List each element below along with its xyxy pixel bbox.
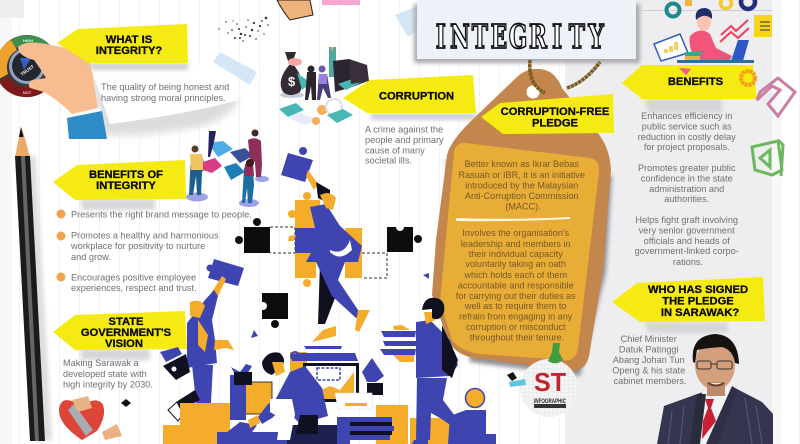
blue piece top xyxy=(281,153,313,182)
text: vision: Making Sarawak a xyxy=(63,358,139,368)
black piece left xyxy=(244,227,270,253)
illustration: left man xyxy=(160,276,234,421)
pencil xyxy=(15,127,52,442)
icon: pink paper clip xyxy=(757,78,795,116)
text: pledge detail: voluntarily taking an oath xyxy=(465,259,566,269)
text: pledge detail: well as to require them to xyxy=(464,301,567,311)
text: pledge intro: (MACC). xyxy=(505,202,541,212)
text: pledge detail: for carrying out their duties as xyxy=(456,291,576,301)
text: benefits list: reduction in costly delay xyxy=(638,132,736,142)
banner: state vision: STATE xyxy=(108,316,144,328)
portrait: chief minister xyxy=(657,334,773,444)
gear navy xyxy=(741,0,755,9)
banner: corruption-free pledge xyxy=(481,94,614,134)
illustration: man with papers xyxy=(380,298,470,444)
text: benefits list: Helps fight graft involving xyxy=(635,215,738,225)
banner: benefits of integrity: INTEGRITY xyxy=(96,180,156,192)
text: benefits list: Promotes greater public xyxy=(638,163,736,173)
text: pledge detail: corruption or misconduct xyxy=(466,322,566,332)
text: bullets: and grow. xyxy=(71,252,111,262)
orange pieces xyxy=(295,200,320,253)
text: pledge intro: introduced by the Malaysian xyxy=(465,180,578,190)
illustration: crouching man xyxy=(222,352,328,441)
menu icon xyxy=(754,15,772,37)
text: benefits list: rations. xyxy=(673,257,703,267)
ink splatter xyxy=(218,17,269,42)
banner: who has signed xyxy=(612,277,765,333)
illustration: corruption money: $ xyxy=(288,74,296,89)
dial: NOT xyxy=(23,90,32,95)
person xyxy=(690,30,732,60)
white divider xyxy=(456,217,570,221)
person top xyxy=(208,131,216,157)
pushpin xyxy=(548,343,563,363)
books xyxy=(685,52,701,56)
banner: corruption xyxy=(343,75,476,120)
bulb xyxy=(685,0,692,6)
text: benefits list: government-linked corpo- xyxy=(635,246,739,256)
illustration: analyst at laptop xyxy=(638,0,772,63)
title card xyxy=(414,0,640,63)
dial: HIGH xyxy=(23,38,33,43)
logo: ST infographic: INFOGRAPHIC xyxy=(534,399,567,405)
gear yellow xyxy=(720,0,732,8)
plant left xyxy=(231,364,252,376)
banner: what is integrity xyxy=(57,24,188,70)
dial xyxy=(0,35,58,97)
icon: green paper clip xyxy=(752,140,783,176)
inner panel xyxy=(440,143,599,360)
black piece lower xyxy=(262,293,288,319)
woman xyxy=(242,168,254,203)
text: pledge detail: throughout their tenure. xyxy=(470,332,564,342)
text: benefits list: confidence in the state xyxy=(641,174,733,184)
logo: ST infographic xyxy=(520,343,578,417)
bullet list xyxy=(56,210,254,293)
black piece right xyxy=(387,227,413,252)
banner: who has signed: THE PLEDGE xyxy=(662,296,734,308)
text: corruption description: societal ills. xyxy=(365,156,412,166)
illustration: centre man xyxy=(288,170,370,342)
blue blocks xyxy=(230,375,246,420)
text: pledge detail: leadership and members in xyxy=(461,239,571,249)
banner: corruption-free pledge: PLEDGE xyxy=(532,118,579,130)
text: pledge detail: which holds each of them xyxy=(463,270,567,280)
bullet xyxy=(56,232,66,240)
text: bullets: Presents the right brand message to people. xyxy=(71,210,252,220)
chart card xyxy=(654,34,688,61)
banner: what is integrity: WHAT IS xyxy=(106,34,153,46)
blue piece left xyxy=(208,259,244,286)
monitor xyxy=(303,363,359,402)
illustration: desk scene xyxy=(163,346,496,444)
text: corruption description: people and primary xyxy=(365,135,444,145)
small tape and diamond xyxy=(507,372,526,387)
text: pledge intro: Rasuah or IBR, it is an initiative xyxy=(459,170,585,180)
banner: benefits of integrity: BENEFITS OF xyxy=(89,169,163,181)
text: vision: developed state with xyxy=(63,369,147,379)
banner: benefits: BENEFITS xyxy=(668,76,724,88)
pink note at top xyxy=(322,0,360,5)
person left xyxy=(189,154,206,195)
banner: corruption: CORRUPTION xyxy=(379,90,454,102)
banner: who has signed: WHO HAS SIGNED xyxy=(648,284,748,296)
paper tray xyxy=(335,393,373,409)
icon: hand on dial xyxy=(18,43,107,139)
banner: state vision: GOVERNMENT'S xyxy=(81,327,172,339)
laptop xyxy=(731,40,749,61)
bullet xyxy=(56,210,66,218)
tag: corruption-free pledge xyxy=(432,60,612,376)
text: benefits list: Enhances efficiency in xyxy=(641,111,732,121)
text: benefits list: authorities. xyxy=(664,194,709,204)
text: bullets: Encourages positive employee xyxy=(71,272,196,282)
stack xyxy=(337,417,394,444)
pencil shaving at top xyxy=(277,0,313,20)
text: benefits list: very senior government xyxy=(639,226,735,236)
orange blocks xyxy=(163,403,230,444)
gear teal xyxy=(666,4,680,16)
logo: ST infographic: ST xyxy=(534,367,566,397)
illustration: jigsaw assembly xyxy=(206,147,429,338)
text: signatories: Openg & his state xyxy=(612,366,685,376)
text: benefits list: for project proposals. xyxy=(644,142,730,152)
arrows xyxy=(720,20,749,42)
text: signatories: Datuk Patinggi xyxy=(619,344,679,354)
globe xyxy=(466,388,484,408)
text: bullets: experiences, respect and trust. xyxy=(71,283,197,293)
bullet xyxy=(56,272,66,282)
text: vision: high integrity by 2030. xyxy=(63,380,153,390)
blue tape definition xyxy=(213,52,257,85)
dial: TRUST xyxy=(20,64,35,77)
books on monitor xyxy=(292,346,358,361)
banner: state vision xyxy=(53,311,187,360)
icon: heart and sharpener xyxy=(59,396,131,440)
illustration: people with puzzle xyxy=(186,130,269,207)
text: pledge intro: Anti-Corruption Commission xyxy=(465,191,579,201)
rope xyxy=(530,60,600,93)
title: INTEGRITY xyxy=(436,17,605,56)
text: pledge detail: their individual capacity xyxy=(469,249,563,259)
text: benefits list: officials and heads of xyxy=(644,236,730,246)
banner: what is integrity: INTEGRITY? xyxy=(96,45,162,57)
text: bullets: workplace for positivity to nurture xyxy=(70,241,205,251)
gear orange xyxy=(741,71,755,85)
text: signatories: Chief Minister xyxy=(621,334,677,344)
triangles xyxy=(423,273,429,279)
text: pledge detail: refrain from engaging in any xyxy=(459,312,573,322)
plant right xyxy=(362,358,384,382)
illustration: corruption money xyxy=(279,47,369,125)
banner: benefits xyxy=(622,65,757,113)
blue tape top xyxy=(395,0,463,37)
text: signatories: Abang Johari Tun xyxy=(613,355,685,365)
dashed outlines xyxy=(270,227,387,278)
text: corruption description: A crime against the xyxy=(365,124,443,134)
text: definition: The quality of being honest and xyxy=(101,82,229,92)
text: definition: having strong moral principles. xyxy=(101,93,226,103)
text: benefits list: public service such as xyxy=(642,122,732,132)
puzzle blocks xyxy=(208,141,233,157)
text: corruption description: cause of many xyxy=(365,146,425,156)
banner: state vision: VISION xyxy=(105,338,143,350)
person right xyxy=(248,138,262,177)
text: bullets: Promotes a healthy and harmonious xyxy=(71,230,219,240)
text: benefits list: administration and xyxy=(649,184,724,194)
text: pledge intro: Better known as Ikrar Bebas xyxy=(465,159,579,169)
paper plane xyxy=(679,68,691,75)
banner: corruption-free pledge: CORRUPTION-FREE xyxy=(501,106,610,118)
banner: who has signed: IN SARAWAK? xyxy=(661,307,739,319)
text: pledge detail: accountable and responsible xyxy=(458,280,574,290)
text: pledge detail: Involves the organisation's xyxy=(462,228,570,238)
paper note behind definition xyxy=(90,64,240,135)
banner: benefits of integrity xyxy=(53,160,186,210)
text: signatories: cabinet members. xyxy=(613,376,687,386)
